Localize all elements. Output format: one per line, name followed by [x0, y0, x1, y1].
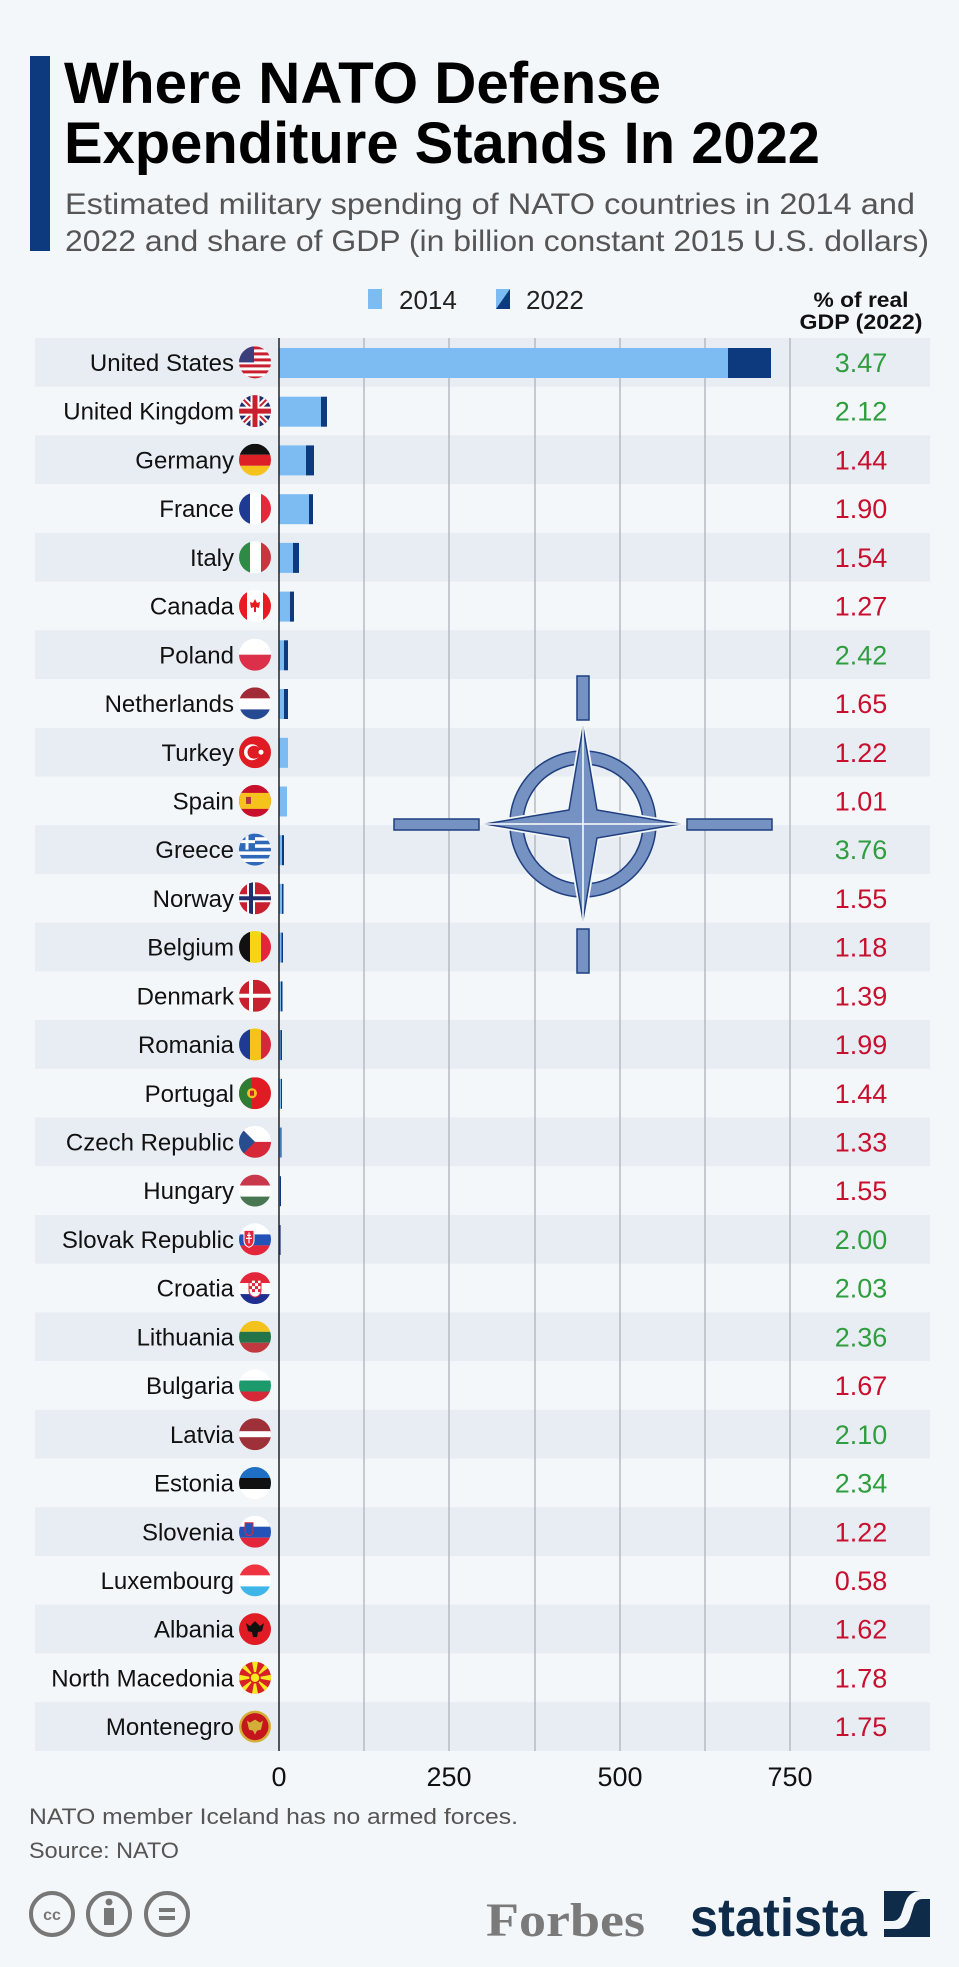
- GDP share values: 1.22: [835, 1517, 887, 1547]
- Forbes logo: Forbes: [486, 1894, 645, 1947]
- legend: [368, 285, 584, 315]
- creative commons icons: [31, 1893, 188, 1935]
- GDP share values: 1.65: [835, 689, 887, 719]
- country labels: Latvia: [170, 1422, 235, 1449]
- country labels: Poland: [159, 642, 234, 669]
- GDP share values: 1.44: [835, 1079, 887, 1109]
- country labels: Slovak Republic: [62, 1227, 234, 1254]
- axis baseline: [278, 338, 280, 1751]
- GDP share values: 2.34: [835, 1469, 887, 1499]
- row bands: [35, 338, 930, 1751]
- country labels: United Kingdom: [63, 399, 234, 426]
- country labels: Estonia: [154, 1471, 235, 1498]
- title: [64, 51, 820, 176]
- country labels: Canada: [150, 594, 235, 621]
- GDP share values: 2.03: [835, 1274, 887, 1304]
- country labels: Bulgaria: [146, 1373, 235, 1400]
- NATO logo watermark: [394, 676, 772, 973]
- GDP share values: 2.10: [835, 1420, 887, 1450]
- title: Expenditure Stands In 2022: [64, 111, 820, 176]
- GDP share values: 1.99: [835, 1030, 887, 1060]
- GDP share values: 0.58: [835, 1566, 887, 1596]
- subtitle: [65, 188, 929, 258]
- GDP share values: 2.00: [835, 1225, 887, 1255]
- country labels: Romania: [138, 1032, 235, 1059]
- country labels: Czech Republic: [66, 1130, 234, 1156]
- GDP share values: 1.67: [835, 1371, 887, 1401]
- notes and source: NATO member Iceland has no armed forces.: [29, 1804, 518, 1829]
- GDP share values: 1.75: [835, 1712, 887, 1742]
- x-axis labels: 250: [426, 1762, 472, 1792]
- bars: [279, 348, 771, 1255]
- GDP share values: 1.27: [835, 592, 887, 622]
- notes and source: [29, 1804, 518, 1863]
- x-axis labels: [271, 1762, 813, 1792]
- creative commons icons: cc: [43, 1907, 61, 1924]
- legend: 2022: [526, 285, 584, 315]
- GDP share values: 1.01: [835, 786, 887, 816]
- country labels: North Macedonia: [51, 1665, 235, 1692]
- x-axis labels: 500: [597, 1762, 643, 1792]
- country labels: Turkey: [162, 740, 234, 767]
- legend: 2014: [399, 285, 457, 315]
- statista logo: statista: [690, 1888, 868, 1948]
- GDP share values: 1.22: [835, 738, 887, 768]
- country labels: Norway: [153, 886, 234, 913]
- GDP share values: 1.90: [835, 494, 887, 524]
- GDP share values: 1.44: [835, 445, 887, 475]
- country labels: Portugal: [145, 1081, 234, 1108]
- GDP share values: 2.36: [835, 1322, 887, 1352]
- GDP share values: 2.42: [835, 640, 887, 670]
- country labels: Italy: [190, 545, 234, 572]
- country labels: Denmark: [137, 983, 235, 1010]
- GDP share values: 1.62: [835, 1615, 887, 1645]
- country labels: Montenegro: [106, 1714, 234, 1741]
- subtitle: Estimated military spending of NATO countries in 2014 and: [65, 188, 915, 221]
- GDP share values: 3.47: [835, 348, 887, 378]
- country labels: Albania: [154, 1617, 235, 1644]
- x-axis labels: 750: [767, 1762, 813, 1792]
- country labels: [51, 350, 235, 1741]
- country labels: Greece: [155, 837, 234, 864]
- GDP share values: [835, 348, 887, 1742]
- GDP share values: 1.54: [835, 543, 887, 573]
- x-axis labels: 0: [271, 1762, 287, 1792]
- subtitle: 2022 and share of GDP (in billion constant 2015 U.S. dollars): [65, 225, 929, 258]
- country labels: Luxembourg: [101, 1568, 234, 1595]
- notes and source: Source: NATO: [29, 1838, 179, 1863]
- GDP share values: 1.18: [835, 933, 887, 963]
- GDP share values: 1.39: [835, 981, 887, 1011]
- country labels: Germany: [135, 447, 234, 474]
- column header: % of real GDP: GDP (2022): [800, 311, 922, 334]
- country labels: Lithuania: [137, 1324, 235, 1351]
- GDP share values: 1.55: [835, 884, 887, 914]
- country labels: Spain: [173, 788, 234, 816]
- title: Where NATO Defense: [64, 51, 661, 116]
- GDP share values: 1.55: [835, 1176, 887, 1206]
- country labels: Belgium: [147, 935, 234, 962]
- country labels: Croatia: [157, 1276, 235, 1303]
- column header: % of real GDP: [800, 289, 922, 334]
- GDP share values: 1.33: [835, 1128, 887, 1158]
- country labels: Slovenia: [142, 1519, 235, 1546]
- GDP share values: 2.12: [835, 397, 887, 427]
- country labels: United States: [90, 350, 234, 377]
- column header: % of real GDP: % of real: [814, 289, 908, 312]
- country labels: France: [159, 496, 234, 523]
- GDP share values: 3.76: [835, 835, 887, 865]
- title accent bar: [30, 56, 50, 251]
- country labels: Netherlands: [105, 691, 234, 718]
- GDP share values: 1.78: [835, 1663, 887, 1693]
- flags: [239, 346, 271, 1743]
- country labels: Hungary: [143, 1178, 234, 1205]
